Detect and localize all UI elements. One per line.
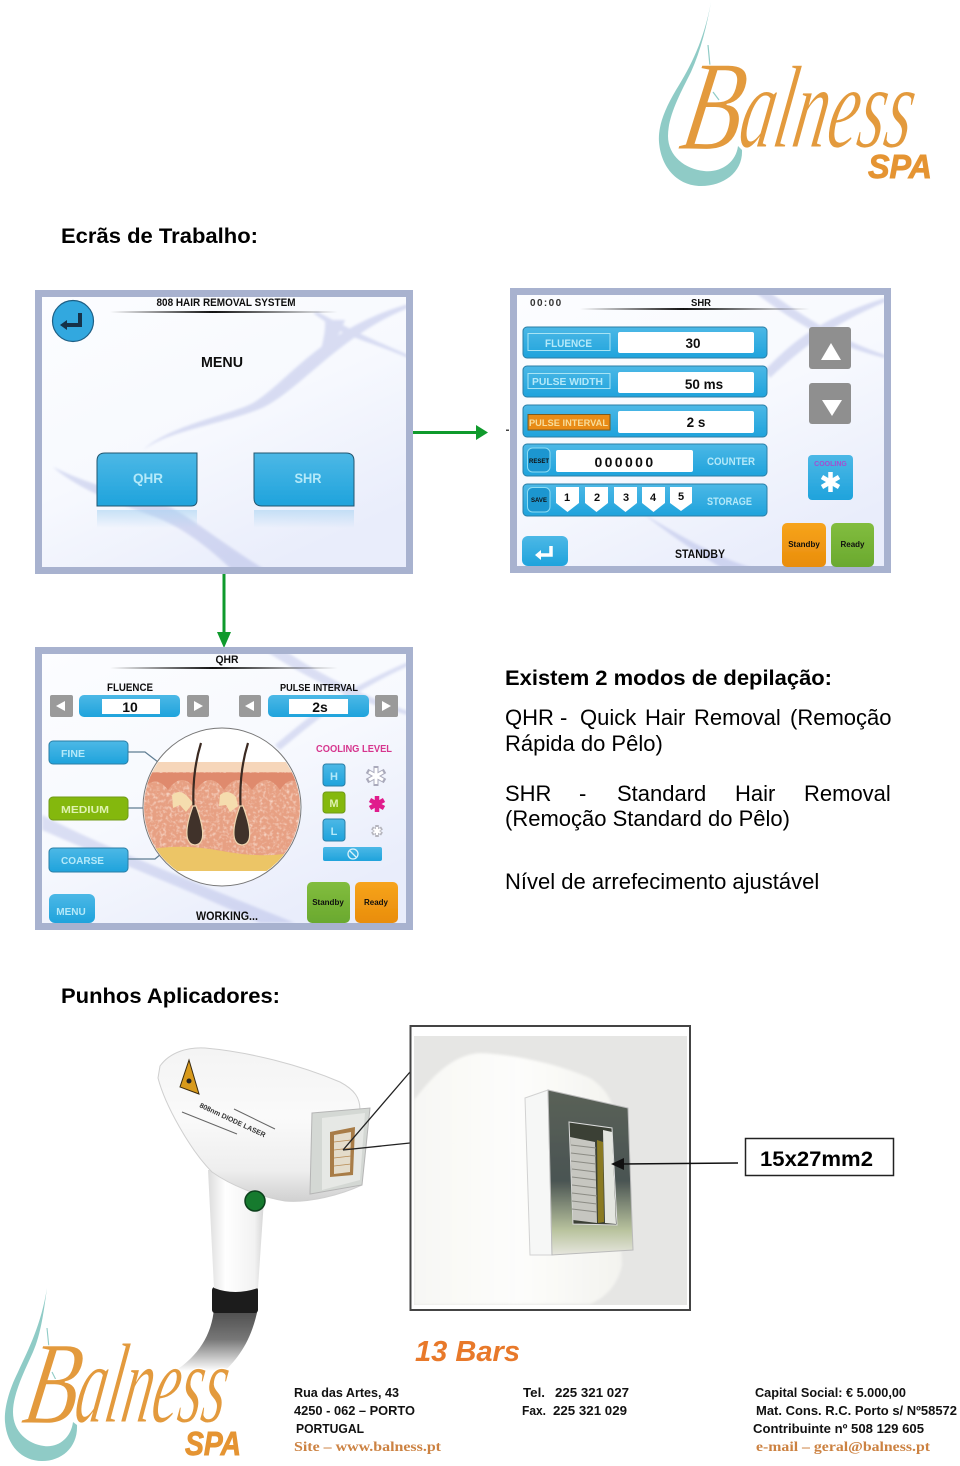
label: 13 Bars: 13 Bars [415,1336,520,1368]
callout: size label [746,1138,894,1176]
panel: SHR screen [514,285,888,570]
button: standby [307,882,350,923]
text block: depilation modes [505,666,891,894]
SHR description: Removal [804,781,891,806]
SHR description: - [579,781,586,806]
QHR description: Quick [580,705,637,730]
row: counter [523,444,767,476]
row: storage: 2 [594,492,600,504]
fluence control: 10 [122,699,138,715]
fluence control: FLUENCE [107,682,153,694]
menu label: MENU [201,354,243,371]
footer: address: PORTUGAL [296,1421,364,1436]
status label: WORKING... [196,909,258,923]
row: pulse width [523,366,767,397]
QHR description: Removal [694,705,781,730]
button: cooling [808,455,853,500]
handpiece illustration [158,1048,370,1371]
button: L [323,819,345,841]
row: fluence: FLUENCE [545,338,592,350]
SHR description line 2: (Remoção Standard do Pêlo) [505,806,790,831]
heading: Punhos Aplicadores: Punhos Aplicadores: [61,984,280,1008]
panel: QHR screen [38,647,410,926]
icon: green trigger [245,1191,265,1211]
connector lines [128,752,161,859]
emitter plate [310,1108,370,1194]
footer: address: Rua das Artes, 43 [294,1385,399,1400]
handpiece label: 808nm DIODE LASER [198,1102,266,1139]
status label: STANDBY [675,547,725,561]
QHR description: (Remoção [790,705,891,730]
QHR description line 2: Rápida do Pêlo) [505,731,663,756]
button: coarse [49,848,128,872]
callout: size label: 15x27mm2 [760,1147,873,1171]
skin diagram [140,728,305,886]
row: storage: 1 [564,492,570,504]
button: standby [782,523,826,567]
subheading: Existem 2 modos de depilação: [505,666,832,690]
button: fine [49,741,128,764]
button: ready: Ready [840,540,865,549]
button: standby: Standby [788,540,820,549]
logo: Balness SPA footer: SPA [185,1425,241,1462]
arrow: size callout [611,1158,738,1170]
footer: company details: Contribuinte nº 508 129 605 [753,1421,924,1436]
button: ready [355,882,398,923]
button: down [809,383,851,424]
icon: return button [522,536,568,566]
row: storage: 3 [623,492,629,504]
icon: low cooling [372,825,382,837]
row: fluence [523,327,767,358]
cooling note: Nível de arrefecimento ajustável [505,869,819,894]
footer: phone and fax: 225 321 027 [555,1385,629,1400]
logo: Balness SPA footer: B [15,1318,93,1449]
SHR description: SHR [505,781,551,806]
icon: laser warning [180,1060,199,1094]
button: off [323,847,382,861]
heading: Ecrãs de Trabalho: Ecrãs de Trabalho: [61,224,258,248]
footer: company details: e-mail – geral@balness.pt [756,1440,930,1455]
row: counter: RESET [529,459,549,465]
button: ready: Ready [364,898,389,907]
button: fine: FINE [61,748,85,760]
row: pulse interval [523,405,767,437]
footer: phone and fax: Tel. [523,1385,545,1400]
pulse interval control: PULSE INTERVAL [280,682,358,694]
logo: Balness SPA footer [5,1288,241,1462]
logo: Balness SPA top: SPA [868,148,932,185]
footer: address: Site – www.balness.pt [294,1440,441,1455]
footer: address: 4250 - 062 – PORTO [294,1403,415,1418]
row: storage: SAVE [531,498,547,504]
button: medium: MEDIUM [61,804,109,816]
button: M [323,792,345,813]
footer: company details [753,1385,957,1455]
button: menu: MENU [56,907,86,918]
button: SHR: SHR [294,470,322,486]
button: menu [49,894,95,923]
footer: phone and fax [522,1385,629,1418]
screen title: QHR [216,654,239,666]
emitter close-up photo [414,1036,687,1305]
button: SHR [254,453,354,528]
pulse interval control: 2s [312,699,328,715]
footer: company details: Mat. Cons. R.C. Porto s/ Nº58572 [756,1403,957,1418]
panel: menu screen [38,294,410,573]
row: pulse interval: 2 s [687,415,705,430]
SHR description: Hair [735,781,775,806]
icon: medium cooling [370,796,384,812]
screen title: SHR [691,297,711,309]
row: pulse width: 50 ms [685,377,723,392]
icon: high cooling [367,766,385,786]
row: storage: STORAGE [707,496,752,508]
fluence control [50,682,209,717]
logo: Balness SPA footer: alness [68,1321,240,1447]
icon: return button [52,300,94,342]
SHR description: Standard [617,781,706,806]
arrow: menu to SHR [413,425,509,440]
button: ready [831,523,874,567]
callout lines [343,1072,410,1150]
detail frame [410,1026,690,1310]
logo: Balness SPA top: B [672,35,757,177]
row: counter: COUNTER [707,456,755,468]
timer: 00:00 [530,298,563,309]
button: H [323,764,345,786]
button: QHR [97,453,197,528]
QHR description: - [560,705,567,730]
row: pulse width: PULSE WIDTH [532,376,603,388]
button: medium [49,797,128,820]
row: storage: 5 [678,491,684,503]
footer: phone and fax: Fax. [522,1403,546,1418]
cooling level label: COOLING LEVEL [316,743,393,755]
QHR description: Hair [645,705,685,730]
footer: company details: Capital Social: € 5.000,00 [755,1385,906,1400]
row: fluence: 30 [685,336,701,351]
row: pulse interval: PULSE INTERVAL [529,418,608,429]
button: QHR: QHR [133,470,163,486]
footer: address [294,1385,441,1455]
pulse interval control [239,682,398,717]
row: storage [523,484,767,516]
QHR description: QHR [505,705,554,730]
button: H: H [330,771,338,783]
logo: Balness SPA top [659,2,932,186]
footer: phone and fax: 225 321 029 [553,1403,627,1418]
button: up [809,327,851,369]
screen title: 808 HAIR REMOVAL SYSTEM [156,297,296,309]
row: counter: 000000 [594,454,656,470]
button: standby: Standby [312,898,344,907]
button: coarse: COARSE [61,855,104,867]
button: M: M [329,798,339,810]
arrow: menu to QHR [217,574,231,648]
button: L: L [331,826,338,838]
row: storage: 4 [650,492,657,504]
button: cooling: COOLING [814,461,847,468]
